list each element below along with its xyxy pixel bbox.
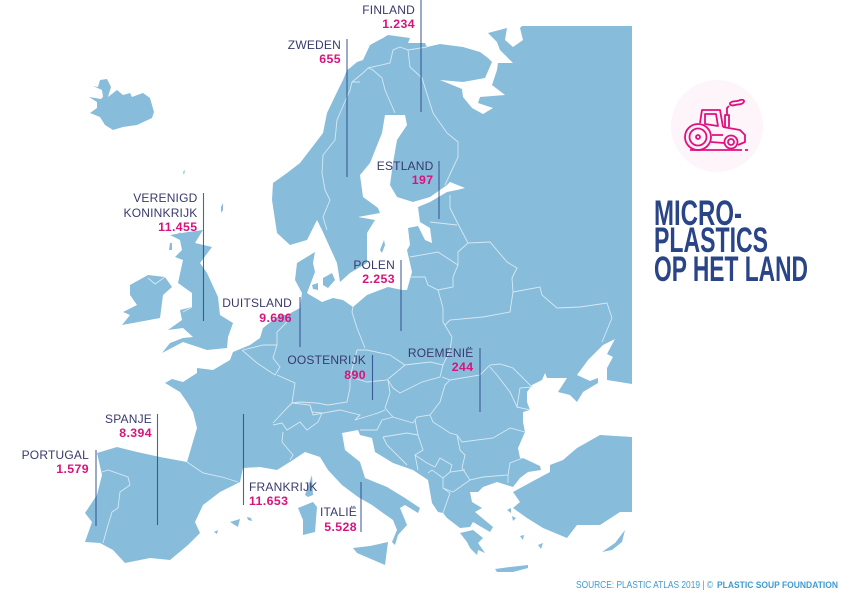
source credit: SOURCE: PLASTIC ATLAS 2019 | © [576,580,714,591]
label: Zweden [288,38,347,177]
label: Frankrijk: FRANKRIJK [249,480,317,494]
label: Duitsland [222,296,300,347]
label: Verenigd Koninkrijk [123,191,204,321]
label: Roemenië: 244 [452,360,474,374]
label: Estland [377,159,439,219]
label: Estland: ESTLAND [377,159,434,173]
label: Finland [362,0,421,112]
land: Ireland [122,275,172,325]
label: Oostenrijk [287,353,372,400]
title: PLASTICS [654,220,768,260]
title [654,193,808,289]
label: Polen: 2.253 [362,272,395,286]
map of Europe [85,26,632,572]
label: Roemenië [408,346,480,412]
land: Iceland [89,79,154,130]
label: Roemenië: ROEMENIË [408,346,474,360]
label: Portugal: PORTUGAL [22,448,89,462]
label: Polen: POLEN [353,258,395,272]
label: Portugal [22,448,96,526]
label: Frankrijk: 11.653 [249,494,288,508]
label: Zweden: 655 [319,52,341,66]
land: Great Britain [162,230,233,353]
label: Zweden: ZWEDEN [288,38,341,52]
land: Turkey [513,435,632,538]
label: Verenigd Koninkrijk: 11.455 [158,220,198,234]
label: Estland: 197 [412,173,434,187]
label: Italië: 5.528 [324,520,357,534]
label: Spanje: SPANJE [105,412,152,426]
label: Duitsland: 9.696 [259,311,292,325]
label: Portugal: 1.579 [56,462,89,476]
label: Verenigd Koninkrijk: KONINKRIJK [123,206,198,220]
label: Italië: ITALIË [320,505,357,519]
land: islands [169,170,625,572]
label: Frankrijk [244,414,317,508]
label: Polen [353,258,401,331]
icon: tractor in pink circle [671,80,763,172]
label: Italië [320,482,361,534]
label: Oostenrijk: OOSTENRIJK [287,353,366,367]
label: Spanje: 8.394 [119,426,152,440]
label: Finland: FINLAND [362,3,415,17]
label: Duitsland: DUITSLAND [222,296,292,310]
label: Finland: 1.234 [382,17,415,31]
country borders [102,47,612,543]
label: Verenigd Koninkrijk: VERENIGD [133,191,198,205]
label: Spanje [105,412,158,525]
label: Oostenrijk: 890 [344,368,366,382]
source credit [576,580,838,591]
title: MICRO- [654,193,742,233]
land: continental Europe [85,26,632,563]
